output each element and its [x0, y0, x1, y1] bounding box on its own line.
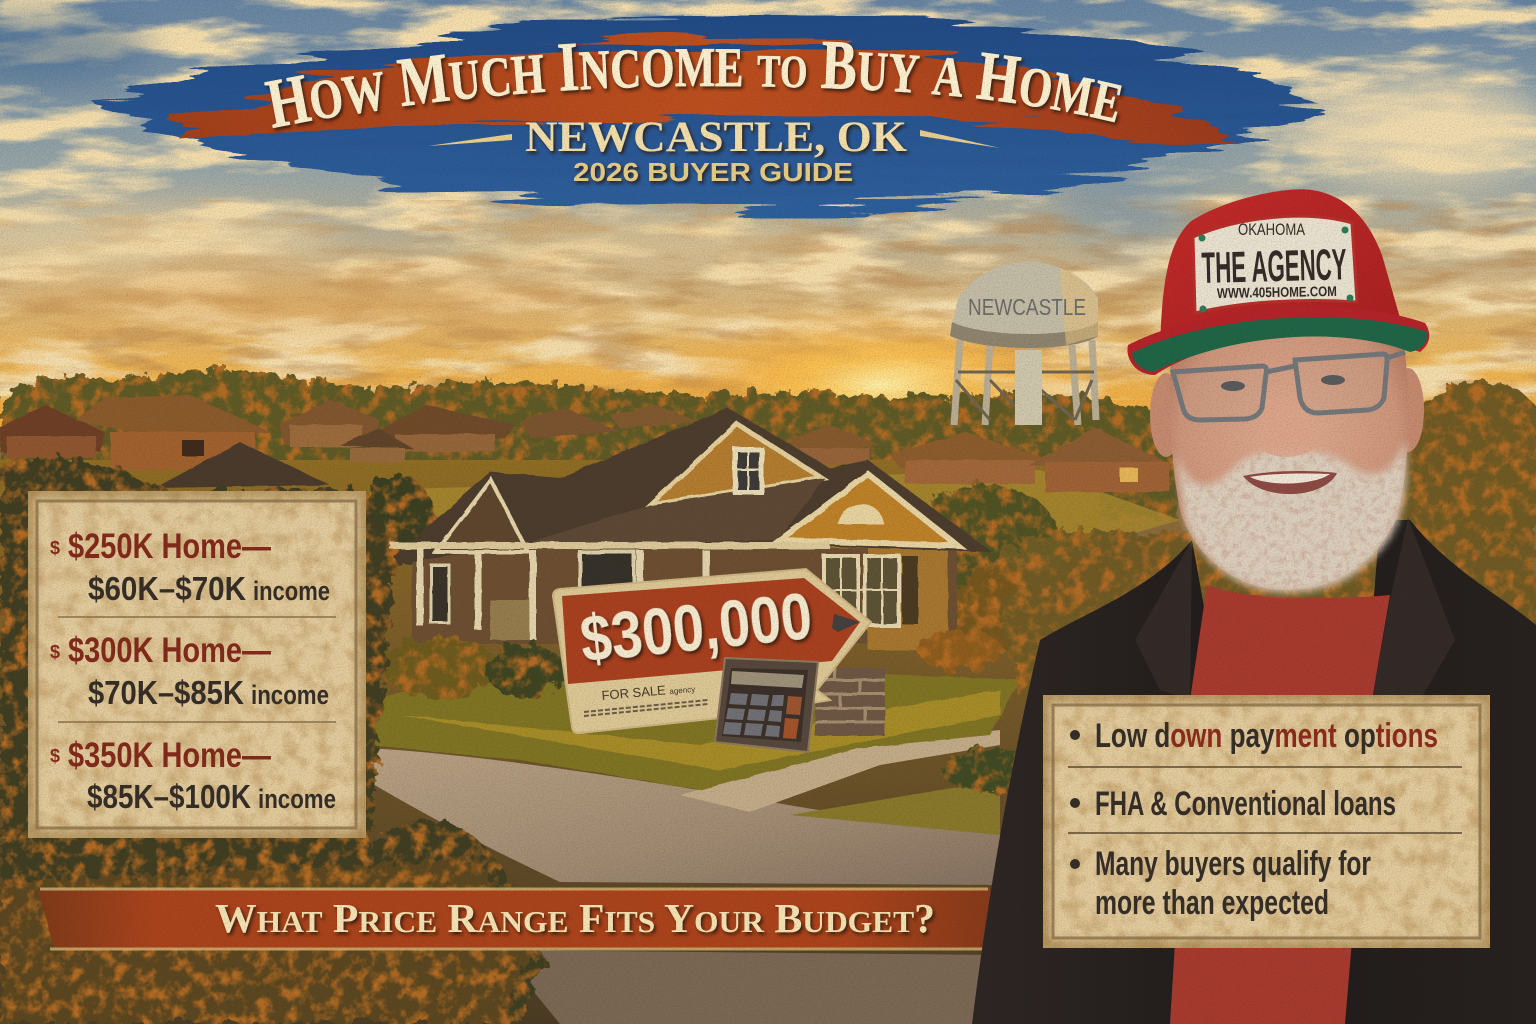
panel border: [1053, 705, 1480, 938]
nose: [1261, 395, 1319, 457]
ears: [1150, 368, 1424, 457]
sign board: [553, 569, 871, 733]
front lawn: [366, 660, 1020, 790]
hat brim: [1127, 307, 1429, 375]
bullet: qualify: Many buyers qualify for: [1095, 845, 1371, 883]
panel paper: [1043, 695, 1490, 948]
row: $250K: $60K–$70K: [88, 570, 246, 607]
row: $250K: income: [253, 576, 330, 606]
row: $250K: $: [50, 538, 60, 558]
price sign: [553, 569, 871, 733]
face: [1170, 325, 1408, 590]
calculator: [715, 658, 818, 752]
row: $300K: [50, 631, 329, 711]
row: $350K: $350K Home—: [68, 736, 271, 775]
title red brush stroke: [180, 42, 1240, 142]
eyes: [1221, 375, 1345, 391]
row: $300K: $: [50, 642, 60, 662]
title blue brush stroke: [95, 16, 1320, 212]
gable window: [733, 447, 764, 495]
row: $350K: [50, 736, 336, 815]
panel paper: [28, 491, 366, 838]
house body: [412, 545, 957, 650]
row: $300K: income: [251, 680, 329, 710]
windows: [431, 552, 918, 626]
red t-shirt: [1170, 585, 1390, 1024]
road and sidewalk: [366, 730, 1000, 1024]
hat patch: WWW.405HOME.COM: [1217, 283, 1337, 301]
jacket: [972, 520, 1536, 1024]
main house: [383, 408, 992, 650]
ground base: [0, 460, 1180, 1024]
banner ribbon: [38, 888, 990, 950]
bottom banner: [38, 888, 990, 950]
bullet: qualify: [1070, 845, 1371, 922]
upper gable: [650, 424, 822, 505]
lower right gable: [780, 474, 958, 546]
porch columns: [420, 548, 706, 640]
presenter: [972, 189, 1536, 1024]
porch railing: [490, 600, 530, 640]
row: $350K: $: [50, 746, 60, 766]
panel: income by home price: [28, 491, 366, 838]
row: $300K: $300K Home—: [68, 631, 271, 670]
glasses: [1173, 352, 1405, 420]
subtitle flourishes: [428, 130, 1000, 148]
main title: HOW MUCH INCOME TO BUY A HOME: [264, 42, 1126, 132]
left neighbourhood houses: [0, 395, 700, 488]
main roof: [383, 408, 992, 566]
sunburst vent: [838, 504, 884, 524]
subtitle location: NEWCASTLE, OK: [525, 114, 908, 161]
row: $250K: [50, 527, 330, 607]
hat patch: [1193, 216, 1357, 313]
mouth: [1243, 471, 1337, 494]
distant tree line: [0, 369, 1180, 520]
title block: [90, 14, 1326, 218]
sign small text: FOR SALE agency: [601, 680, 696, 703]
bullet: qualify: more than expected: [1095, 884, 1329, 922]
background: painted sky: [0, 0, 1536, 465]
bullet: FHA: [1070, 785, 1396, 823]
bottom foliage: [0, 860, 530, 1024]
hat brim underside: [1132, 317, 1428, 372]
hat crown: [1160, 189, 1404, 348]
bullet: low down payment: Low down payment options: [1095, 717, 1438, 755]
banner edges: [40, 889, 988, 949]
hat patch: THE AGENCY: [1201, 240, 1347, 293]
row: $350K: income: [258, 784, 336, 814]
lower roof band: [520, 478, 825, 545]
water tower: Newcastle: NEWCASTLE: [968, 294, 1086, 320]
subtitle year: 2026 BUYER GUIDE: [573, 157, 853, 187]
panel border: [37, 501, 356, 828]
row: $250K: $250K Home—: [68, 527, 271, 566]
right hillside foliage: [1000, 380, 1536, 700]
shrubs behind the house: [355, 475, 1185, 655]
porch beam: [384, 542, 830, 549]
sign fine print: [584, 700, 708, 716]
left gable: [436, 480, 528, 552]
row: $350K: $85K–$100K: [87, 778, 251, 815]
bullet: FHA: FHA & Conventional loans: [1095, 785, 1396, 823]
banner text: WHAT PRICE RANGE FITS YOUR BUDGET?: [215, 895, 935, 941]
brick pillar: [815, 668, 885, 736]
jacket lapels: [1135, 518, 1455, 700]
left hillside foliage: [0, 457, 545, 1024]
sign red area: [562, 578, 860, 684]
row: $300K: $70K–$85K: [88, 674, 244, 711]
sign hook: [832, 614, 860, 632]
beard: [1176, 440, 1406, 592]
shrubs around the house: [380, 630, 1040, 792]
hat patch: OKAHOMA: [1238, 220, 1306, 239]
water tower: Newcastle: [950, 262, 1098, 425]
sign price: $300,000: [577, 578, 815, 676]
right neighbourhood houses: [790, 425, 1175, 492]
panel: loan highlights: [1043, 695, 1490, 948]
